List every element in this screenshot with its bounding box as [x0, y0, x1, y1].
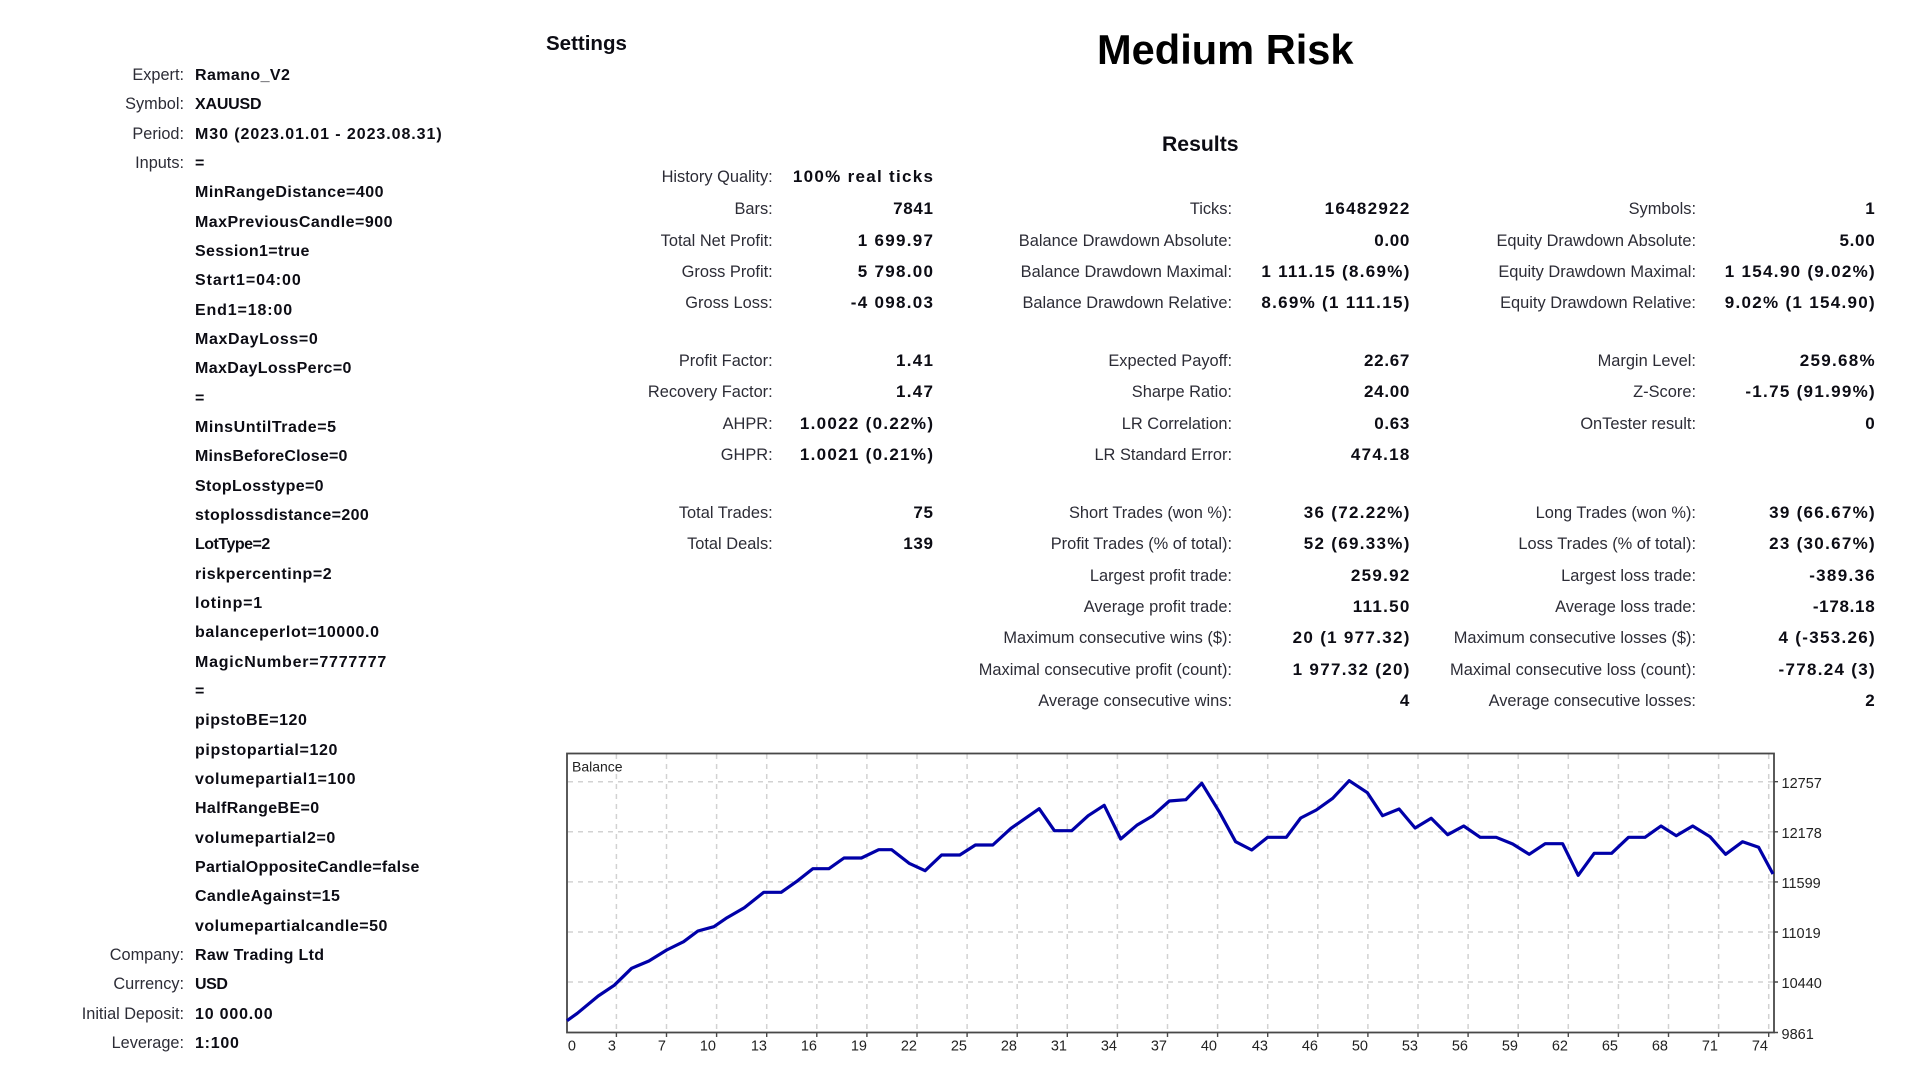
- panel: results column 1: Bars:: [734, 200, 773, 218]
- panel: results column 3: Z-Score:: [1633, 383, 1696, 401]
- plot frame: [567, 754, 1774, 1032]
- x axis labels: 71: [1702, 1038, 1718, 1054]
- panel: results column 2: Balance Drawdown Maximal:: [1021, 263, 1232, 281]
- x axis labels: 0: [568, 1038, 576, 1054]
- panel: results column 3: Maximum consecutive losses ($):: [1454, 629, 1696, 647]
- panel: settings list: MaxPreviousCandle=900: [195, 214, 393, 231]
- panel: results column 2: 1 977.32 (20): [1293, 660, 1411, 679]
- panel: settings list: =: [195, 390, 204, 407]
- y axis labels: [1782, 776, 1822, 1043]
- x axis labels: [568, 1038, 1768, 1054]
- panel: results column 3: Long Trades (won %):: [1536, 504, 1696, 522]
- panel: results column 3: Maximal consecutive loss (count):: [1450, 661, 1696, 679]
- panel: results column 2: Balance Drawdown Relative:: [1022, 294, 1232, 312]
- title: Medium Risk: [1097, 26, 1354, 73]
- panel: results column 2: 36 (72.22%): [1304, 503, 1411, 522]
- panel: results column 3: Loss Trades (% of total):: [1518, 535, 1696, 553]
- panel: results column 3: OnTester result:: [1580, 415, 1696, 433]
- panel: settings list: [82, 66, 443, 1052]
- panel: settings list: MagicNumber=7777777: [195, 654, 387, 671]
- panel: settings list: End1=18:00: [195, 302, 293, 319]
- y axis labels: 10440: [1782, 976, 1822, 992]
- panel: results column 3: Average loss trade:: [1555, 598, 1696, 616]
- panel: results column 1: 100% real ticks: [793, 167, 934, 186]
- panel: settings list: Ramano_V2: [195, 67, 290, 84]
- panel: results column 1: 1 699.97: [858, 231, 934, 250]
- panel: results column 3: -778.24 (3): [1779, 660, 1876, 679]
- panel: results column 3: 9.02% (1 154.90): [1725, 293, 1876, 312]
- panel: results column 3: 39 (66.67%): [1769, 503, 1876, 522]
- x axis labels: 43: [1252, 1038, 1268, 1054]
- panel: results column 3: Equity Drawdown Absolute:: [1496, 232, 1696, 250]
- chart: balance line chart: [567, 754, 1822, 1054]
- panel: results column 1: Total Net Profit:: [661, 232, 773, 250]
- panel: results column 3: 2: [1865, 691, 1875, 710]
- panel: results column 2: Maximal consecutive profit (count):: [979, 661, 1232, 679]
- panel: settings list: Period:: [132, 125, 184, 143]
- panel: results column 2: Profit Trades (% of total):: [1051, 535, 1232, 553]
- panel: settings list: MaxDayLossPerc=0: [195, 360, 352, 377]
- panel: results column 3: Average consecutive losses:: [1489, 692, 1696, 710]
- panel: results column 2: 474.18: [1351, 445, 1411, 464]
- panel: results column 2: Average consecutive wins:: [1038, 692, 1232, 710]
- panel: results column 2: 8.69% (1 111.15): [1261, 293, 1411, 312]
- panel: settings list: M30 (2023.01.01 - 2023.08.31): [195, 126, 443, 143]
- panel: results column 1: 75: [913, 503, 934, 522]
- panel: results column 2: LR Standard Error:: [1094, 446, 1232, 464]
- y axis labels: 12178: [1782, 826, 1822, 842]
- y axis labels: 11019: [1782, 926, 1821, 942]
- panel: results column 1: -4 098.03: [851, 293, 934, 312]
- panel: results column 1: Profit Factor:: [679, 352, 773, 370]
- panel: settings list: =: [195, 683, 204, 700]
- x axis labels: 50: [1352, 1038, 1368, 1054]
- panel: results column 2: 0.00: [1374, 231, 1410, 250]
- panel: settings list: HalfRangeBE=0: [195, 800, 320, 817]
- panel: results column 2: 1 111.15 (8.69%): [1261, 262, 1411, 281]
- x axis labels: 46: [1302, 1038, 1318, 1054]
- panel: settings list: volumepartial2=0: [195, 830, 336, 847]
- y axis labels: 12757: [1782, 776, 1822, 792]
- panel: results column 3: Symbols:: [1629, 200, 1696, 218]
- panel: settings list: Session1=true: [195, 243, 310, 260]
- panel: settings list: Initial Deposit:: [82, 1004, 184, 1022]
- panel: results column 2: 16482922: [1325, 199, 1411, 218]
- panel: results column 2: 259.92: [1351, 566, 1411, 585]
- panel: results column 2: Ticks:: [1190, 200, 1232, 218]
- panel: settings list: Leverage:: [112, 1034, 184, 1052]
- panel: results column 1: Recovery Factor:: [648, 383, 773, 401]
- panel: results column 2: Expected Payoff:: [1108, 352, 1232, 370]
- panel: results column 3: [1450, 199, 1876, 710]
- panel: results column 3: -178.18: [1813, 597, 1875, 616]
- panel: results column 2: Sharpe Ratio:: [1132, 383, 1232, 401]
- panel: results column 2: 111.50: [1353, 597, 1411, 616]
- panel: settings list: XAUUSD: [195, 96, 261, 113]
- panel: settings list: MinRangeDistance=400: [195, 184, 384, 201]
- x axis labels: 53: [1402, 1038, 1418, 1054]
- panel: results column 3: 1: [1865, 199, 1875, 218]
- panel: settings list: =: [195, 155, 204, 172]
- panel: settings list: Symbol:: [125, 95, 184, 113]
- x axis labels: 10: [700, 1038, 716, 1054]
- series label: Balance: [572, 758, 623, 774]
- panel: results column 2: 52 (69.33%): [1304, 534, 1411, 553]
- panel: results column 2: Balance Drawdown Absolute:: [1019, 232, 1232, 250]
- x axis labels: 56: [1452, 1038, 1468, 1054]
- x axis labels: 37: [1151, 1038, 1167, 1054]
- panel: results column 3: Equity Drawdown Relative:: [1500, 294, 1696, 312]
- x axis labels: 28: [1001, 1038, 1017, 1054]
- panel: results column 3: 23 (30.67%): [1769, 534, 1876, 553]
- panel: settings list: pipstopartial=120: [195, 742, 338, 759]
- panel: results column 2: Average profit trade:: [1084, 598, 1232, 616]
- panel: settings list: stoplossdistance=200: [195, 507, 369, 524]
- heading: settings: Settings: [546, 32, 627, 55]
- balance curve: [567, 781, 1773, 1021]
- panel: results column 2: Short Trades (won %):: [1069, 504, 1232, 522]
- panel: settings list: MaxDayLoss=0: [195, 331, 318, 348]
- panel: results column 1: Total Deals:: [687, 535, 773, 553]
- panel: results column 1: Gross Profit:: [682, 263, 773, 281]
- panel: settings list: MinsBeforeClose=0: [195, 448, 348, 465]
- x axis labels: 62: [1552, 1038, 1568, 1054]
- panel: settings list: lotinp=1: [195, 595, 263, 612]
- panel: settings list: 10 000.00: [195, 1006, 273, 1022]
- panel: results column 1: 1.0021 (0.21%): [800, 445, 934, 464]
- panel: results column 3: 259.68%: [1800, 351, 1876, 370]
- panel: settings list: LotType=2: [195, 536, 270, 553]
- panel: results column 1: [648, 167, 934, 553]
- panel: settings list: Raw Trading Ltd: [195, 947, 324, 964]
- panel: results column 1: AHPR:: [723, 415, 773, 433]
- panel: settings list: 1:100: [195, 1035, 240, 1052]
- panel: results column 2: LR Correlation:: [1122, 415, 1232, 433]
- panel: results column 2: 24.00: [1364, 382, 1410, 401]
- panel: settings list: USD: [195, 976, 228, 993]
- panel: settings list: Company:: [110, 946, 184, 964]
- y axis labels: 9861: [1782, 1027, 1814, 1043]
- panel: settings list: Inputs:: [135, 154, 184, 172]
- panel: results column 3: 5.00: [1839, 231, 1875, 250]
- panel: results column 1: 7841: [893, 199, 934, 218]
- panel: settings list: volumepartialcandle=50: [195, 918, 388, 935]
- panel: results column 2: Maximum consecutive wins ($):: [1003, 629, 1232, 647]
- panel: results column 2: [979, 199, 1411, 710]
- heading: results: Results: [1162, 132, 1239, 156]
- x axis labels: 34: [1101, 1038, 1117, 1054]
- panel: results column 2: 20 (1 977.32): [1293, 628, 1411, 647]
- panel: settings list: MinsUntilTrade=5: [195, 419, 337, 436]
- x axis labels: 74: [1752, 1038, 1768, 1054]
- panel: settings list: volumepartial1=100: [195, 771, 356, 788]
- panel: results column 2: 0.63: [1374, 414, 1410, 433]
- panel: results column 1: Gross Loss:: [685, 294, 773, 312]
- x axis labels: 19: [851, 1038, 867, 1054]
- x axis labels: 22: [901, 1038, 917, 1054]
- x axis labels: 31: [1051, 1038, 1067, 1054]
- panel: results column 3: Equity Drawdown Maximal:: [1498, 263, 1696, 281]
- x axis labels: 7: [658, 1038, 666, 1054]
- y axis labels: 11599: [1782, 876, 1821, 892]
- panel: results column 3: 1 154.90 (9.02%): [1725, 262, 1876, 281]
- x axis labels: 40: [1201, 1038, 1217, 1054]
- panel: settings list: CandleAgainst=15: [195, 888, 340, 905]
- panel: results column 1: History Quality:: [662, 168, 773, 186]
- panel: results column 1: Total Trades:: [679, 504, 773, 522]
- panel: settings list: Start1=04:00: [195, 272, 302, 289]
- panel: results column 3: 0: [1865, 414, 1875, 433]
- panel: settings list: balanceperlot=10000.0: [195, 624, 380, 641]
- panel: results column 1: 1.0022 (0.22%): [800, 414, 934, 433]
- x axis labels: 16: [801, 1038, 817, 1054]
- panel: results column 3: -1.75 (91.99%): [1745, 382, 1876, 401]
- panel: results column 3: 4 (-353.26): [1779, 628, 1876, 647]
- panel: settings list: Currency:: [113, 975, 184, 993]
- panel: settings list: riskpercentinp=2: [195, 566, 332, 583]
- x axis labels: 59: [1502, 1038, 1518, 1054]
- panel: results column 1: 139: [903, 534, 934, 553]
- panel: settings list: PartialOppositeCandle=false: [195, 859, 420, 876]
- x axis labels: 68: [1652, 1038, 1668, 1054]
- panel: settings list: Expert:: [132, 66, 184, 84]
- x axis labels: 13: [751, 1038, 767, 1054]
- panel: settings list: StopLosstype=0: [195, 478, 324, 495]
- panel: results column 1: 5 798.00: [858, 262, 934, 281]
- x axis labels: 25: [951, 1038, 967, 1054]
- panel: results column 2: 4: [1400, 691, 1410, 710]
- panel: results column 2: 22.67: [1364, 351, 1410, 370]
- x axis labels: 3: [608, 1038, 616, 1054]
- panel: results column 1: 1.41: [896, 351, 934, 370]
- panel: results column 1: GHPR:: [721, 446, 773, 464]
- panel: results column 3: Largest loss trade:: [1561, 567, 1696, 585]
- panel: settings list: pipstoBE=120: [195, 712, 307, 729]
- panel: results column 2: Largest profit trade:: [1090, 567, 1232, 585]
- panel: results column 1: 1.47: [896, 382, 934, 401]
- panel: results column 3: Margin Level:: [1598, 352, 1696, 370]
- panel: results column 3: -389.36: [1809, 566, 1876, 585]
- x axis labels: 65: [1602, 1038, 1618, 1054]
